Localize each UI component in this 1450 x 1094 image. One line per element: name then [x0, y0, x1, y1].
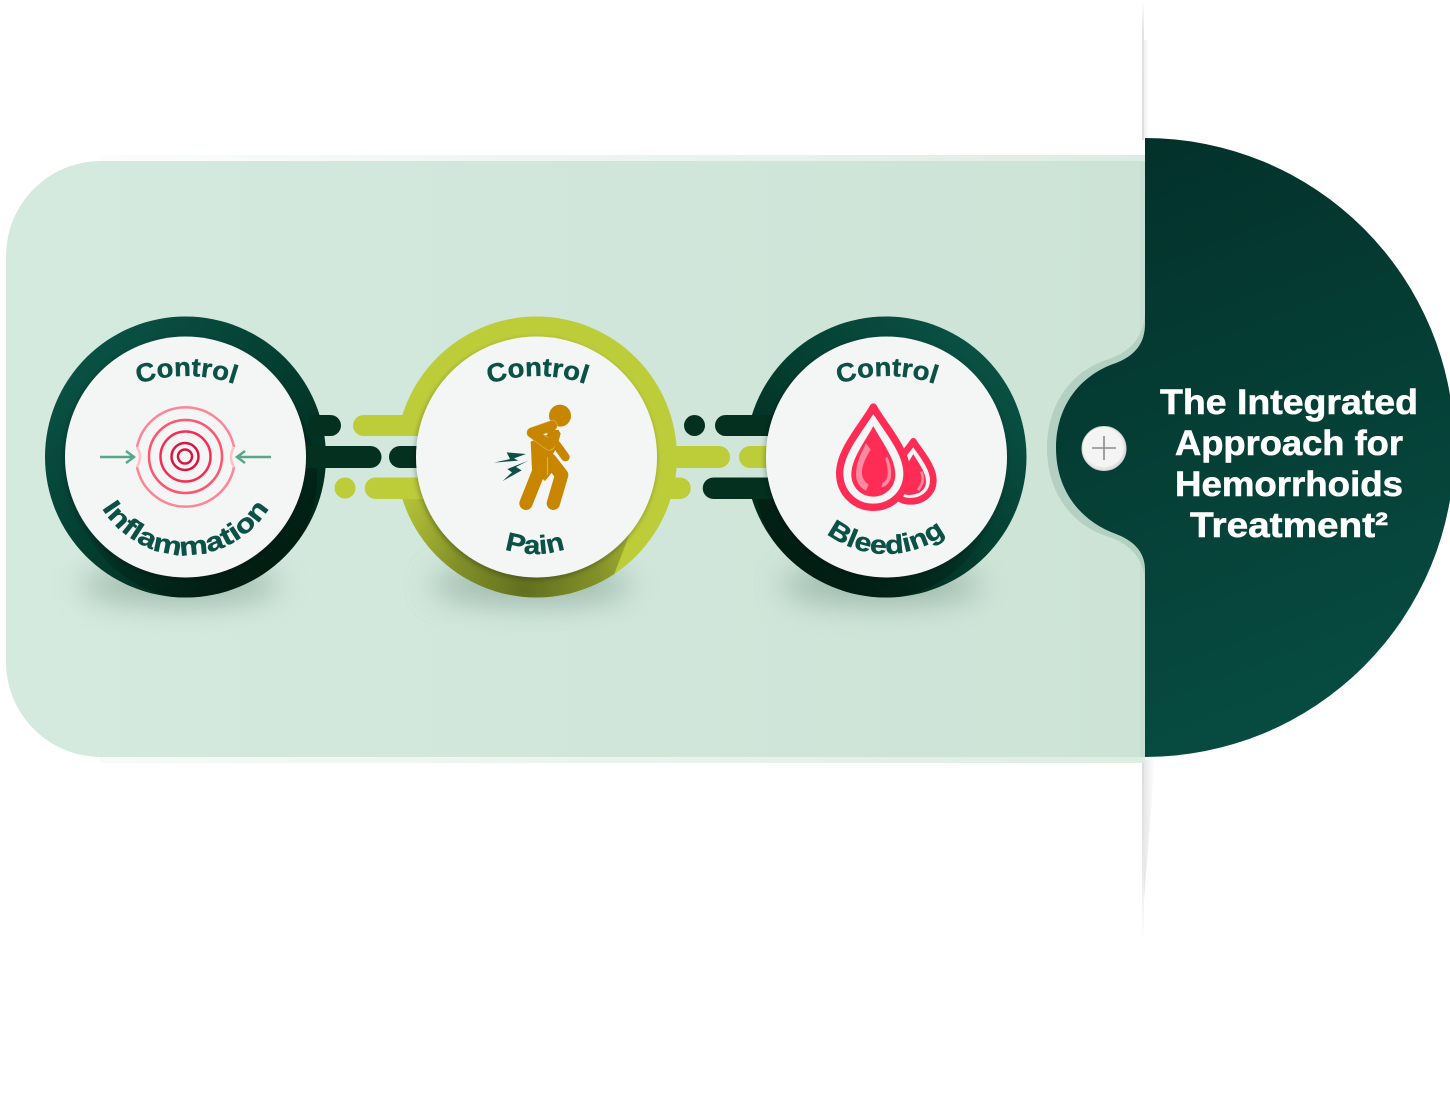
- large drop: [840, 407, 907, 507]
- ring 3: [746, 316, 1026, 598]
- circle 1: Control Inflammation: [63, 336, 306, 578]
- panel: light green background: [6, 155, 1145, 763]
- label: Control: Control: [836, 359, 939, 384]
- title: The Integrated: [1160, 383, 1418, 422]
- icon: inflammation target: [137, 407, 234, 507]
- icon: blood drops: [840, 407, 933, 507]
- connector: dark segment into second circle: [389, 446, 430, 468]
- connector: lime stubs of second circle: [660, 446, 730, 499]
- circle 2: Control Pain: [412, 336, 659, 582]
- connector: dark top bar: [715, 415, 785, 436]
- label: Pain: Pain: [506, 532, 564, 554]
- connector: lime top bar: [353, 415, 430, 436]
- disc 1: [65, 336, 306, 578]
- ring 1 shade: [108, 437, 317, 598]
- connector: dark bottom bar: [703, 478, 785, 499]
- connector: lime bottom bar: [365, 478, 430, 499]
- connectors between circles: [305, 415, 785, 499]
- small drop: [890, 441, 933, 501]
- label: Control: Control: [487, 359, 590, 384]
- outer rings: [45, 316, 1026, 605]
- soft shadows under circles: [80, 565, 981, 605]
- ring 2: [396, 316, 677, 598]
- label: Bleeding: Bleeding: [828, 520, 945, 554]
- disc 3: [766, 336, 1007, 578]
- circle 3: Control Bleeding: [762, 336, 1007, 578]
- title: Treatment²: [1190, 506, 1388, 545]
- ring 1: [45, 316, 326, 598]
- ring 3 shade: [757, 499, 964, 598]
- title: [1160, 383, 1418, 545]
- connector: dark dot: [684, 415, 705, 436]
- vertical divider with fading shadow: [1142, 0, 1155, 942]
- label: Control: Control: [136, 359, 238, 384]
- connector: lime dot: [334, 478, 356, 498]
- title: Hemorrhoids: [1175, 465, 1403, 504]
- panel: dark semicircle with notch: [1047, 138, 1450, 757]
- ring 2 shade: [402, 499, 630, 598]
- connector: lime segment into third circle: [739, 446, 780, 468]
- icon: person with back pain: [494, 405, 571, 503]
- label: Inflammation: Inflammation: [102, 500, 268, 556]
- ring 3 gap: [740, 436, 780, 478]
- icon: arrows pressing inward: [100, 451, 271, 463]
- icon: pain bolts: [494, 452, 528, 481]
- title: Approach for: [1175, 424, 1403, 463]
- connector: dark stubs of first circle: [305, 415, 382, 468]
- ring 2 gap: [390, 436, 430, 478]
- icon: plus button: [1082, 426, 1126, 470]
- disc 2: [416, 336, 657, 578]
